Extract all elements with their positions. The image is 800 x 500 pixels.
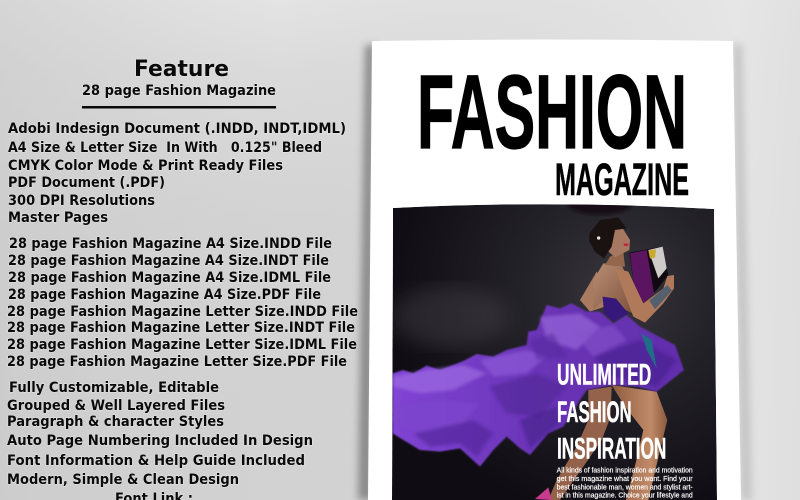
features list: Master Pages: [8, 210, 108, 226]
page right shadow: [733, 44, 752, 500]
extras list: Fully Customizable, Editable: [9, 380, 219, 396]
features list: 300 DPI Resolutions: [8, 193, 155, 209]
heading: UNLIMITED: UNLIMITED: [557, 359, 651, 392]
features list: CMYK Color Mode & Print Ready Files: [8, 158, 283, 174]
file list: 28 page Fashion Magazine A4 Size.IDML File: [8, 270, 331, 286]
hair flower: [597, 236, 600, 240]
file list: [7, 236, 358, 370]
shoe: [535, 487, 552, 500]
back leg: [548, 387, 612, 500]
file list: 28 page Fashion Magazine Letter Size.INDT File: [7, 320, 355, 336]
extras list: Paragraph & character Styles: [7, 414, 224, 430]
forearm: [615, 268, 674, 323]
subheading: 28 page Fashion Magazine: [82, 83, 276, 99]
file list: 28 page Fashion Magazine A4 Size.INDD File: [9, 236, 332, 252]
heading: INSPIRATION: INSPIRATION: [557, 433, 666, 466]
dress: [393, 303, 684, 467]
smoke: [390, 287, 510, 347]
heading: FASHION: FASHION: [557, 396, 632, 429]
torso: [594, 263, 632, 313]
extras list: Auto Page Numbering Included In Design: [7, 433, 313, 449]
cover paragraph: All kinds of fashion inspiration and motivation: [557, 468, 693, 475]
magazine held: [629, 246, 668, 292]
teal ribbon: [642, 333, 657, 368]
dress folds: [393, 313, 677, 457]
cover paragraph: ist in this magazine. Choice your lifestyle and: [557, 493, 693, 500]
features list: [8, 121, 346, 226]
features list: PDF Document (.PDF): [8, 175, 165, 191]
neck: [605, 252, 625, 267]
bracelet: [649, 285, 672, 309]
lips: [624, 243, 628, 246]
file list: 28 page Fashion Magazine A4 Size.PDF File: [8, 287, 321, 303]
hair: [589, 217, 627, 258]
file list: 28 page Fashion Magazine Letter Size.INDD File: [7, 304, 358, 320]
front leg: [612, 385, 667, 500]
back arm: [580, 272, 605, 312]
heading rule: [82, 106, 276, 108]
page shadow: [358, 44, 375, 500]
file list: 28 page Fashion Magazine Letter Size.IDML File: [7, 337, 357, 353]
features list: Adobi Indesign Document (.INDD, INDT,IDML): [8, 121, 346, 137]
cover paragraph: get this magazine what you want. Find your: [557, 476, 693, 483]
cover paragraph: best fashionable man, women and stylist art-: [557, 484, 693, 491]
corset: [603, 297, 628, 322]
file list: 28 page Fashion Magazine A4 Size.INDT File: [8, 253, 329, 269]
heading: Feature: Feature: [134, 56, 229, 82]
cover paragraph: [557, 468, 693, 500]
head: [608, 228, 630, 258]
magazine page: [368, 40, 741, 500]
extras list: [7, 380, 313, 500]
extras list: Grouped & Well Layered Files: [7, 398, 225, 414]
extras list: Font Information & Help Guide Included: [7, 453, 305, 469]
dark hat shadow: [568, 204, 633, 216]
cover photo: [390, 193, 717, 500]
masthead: MAGAZINE: MAGAZINE: [555, 154, 689, 205]
extras list: Modern, Simple & Clean Design: [7, 472, 239, 488]
features list: A4 Size & Letter Size In With 0.125" Bleed: [8, 140, 322, 156]
file list: 28 page Fashion Magazine Letter Size.PDF File: [7, 354, 347, 370]
